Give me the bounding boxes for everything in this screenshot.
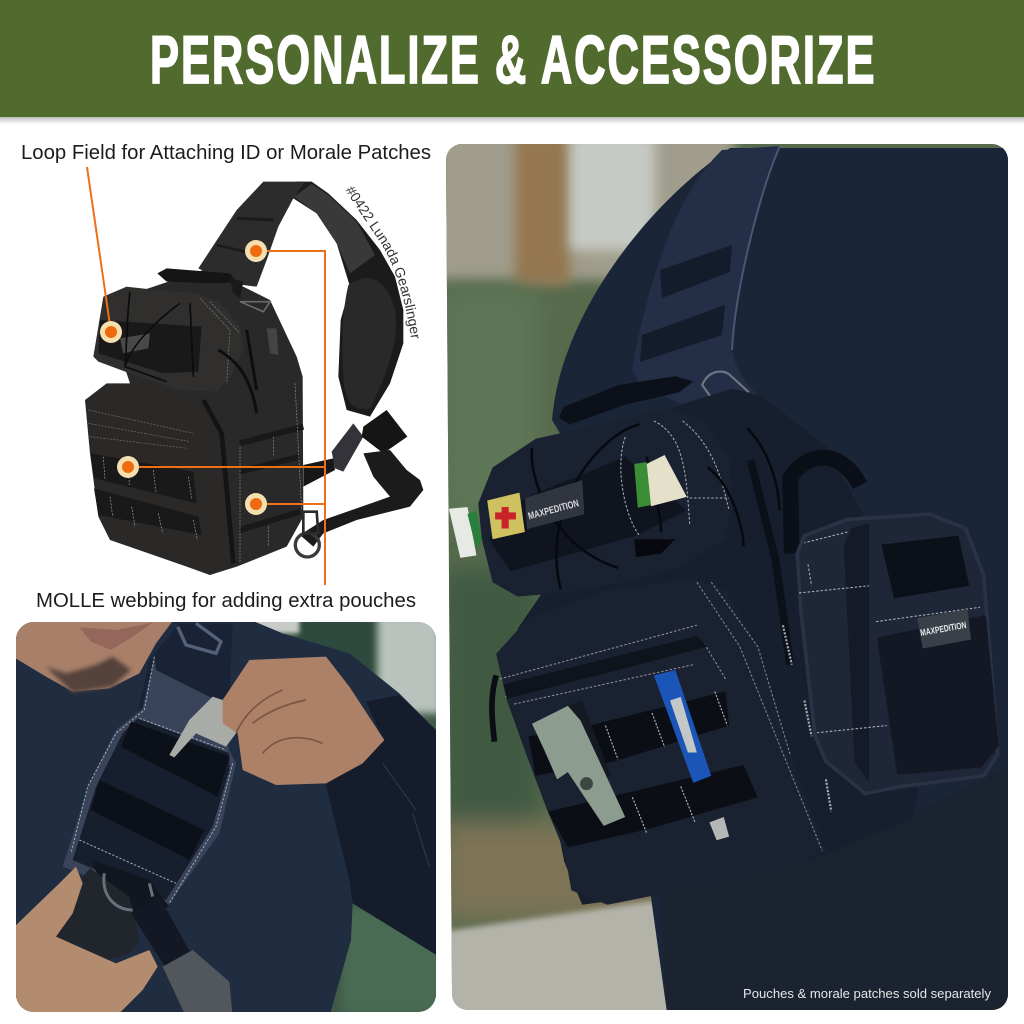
bottle bbox=[449, 507, 476, 558]
note: Pouches & morale patches sold separately bbox=[743, 986, 991, 1001]
left hand bbox=[13, 867, 158, 1017]
illustration: sling bag bbox=[85, 182, 423, 575]
side pouch bbox=[797, 514, 998, 794]
torso bbox=[13, 617, 439, 1017]
medic patch bbox=[487, 493, 525, 539]
product label: #0422 Lunada Gearslinger bbox=[346, 186, 419, 338]
top handle bbox=[559, 376, 693, 425]
photo: strap with multitool bbox=[13, 613, 443, 1017]
side straps and buckles bbox=[303, 458, 335, 487]
bag rear panel bbox=[518, 389, 919, 905]
rear zipper bbox=[751, 460, 790, 665]
pouch brand tag: MAXPEDITION bbox=[919, 620, 967, 638]
pen bbox=[654, 670, 711, 783]
lower strap bbox=[132, 908, 190, 966]
bag body bbox=[103, 270, 303, 575]
multitool bbox=[169, 697, 236, 757]
carabiner bbox=[702, 372, 749, 398]
front pocket bbox=[85, 383, 235, 575]
body bbox=[552, 148, 1020, 1020]
front strap bbox=[198, 182, 305, 287]
strap pad bbox=[63, 657, 236, 908]
back strap pad bbox=[290, 182, 403, 417]
photo: model wearing bag bbox=[435, 130, 1020, 1020]
pouch brand tag bbox=[917, 609, 971, 649]
shoulder strap bbox=[632, 146, 779, 404]
webbing bbox=[528, 692, 758, 847]
callout markers bbox=[100, 240, 267, 515]
hand bbox=[223, 657, 384, 785]
heading: molle: MOLLE webbing for adding extra pouches bbox=[36, 590, 416, 612]
strap loop bbox=[790, 458, 860, 554]
title: PERSONALIZE & ACCESSORIZE bbox=[150, 22, 874, 98]
top pouch bbox=[478, 410, 664, 596]
buckle bbox=[91, 860, 169, 917]
sleeve bbox=[326, 695, 439, 957]
brand tag bbox=[525, 480, 584, 529]
top handle bbox=[157, 268, 237, 283]
brand tag: MAXPEDITION bbox=[527, 498, 580, 522]
buckle bbox=[634, 539, 675, 557]
face bbox=[16, 622, 172, 692]
knife bbox=[532, 700, 625, 826]
upper strap bbox=[138, 624, 232, 712]
heading: loop field: Loop Field for Attaching ID or Morale Patches bbox=[21, 142, 431, 164]
callout lines bbox=[87, 167, 325, 585]
panel: product diagram bbox=[21, 142, 431, 612]
webbing bbox=[91, 722, 229, 860]
top pouch bbox=[93, 287, 243, 392]
header banner bbox=[0, 0, 1024, 124]
lower pocket bbox=[496, 630, 651, 905]
